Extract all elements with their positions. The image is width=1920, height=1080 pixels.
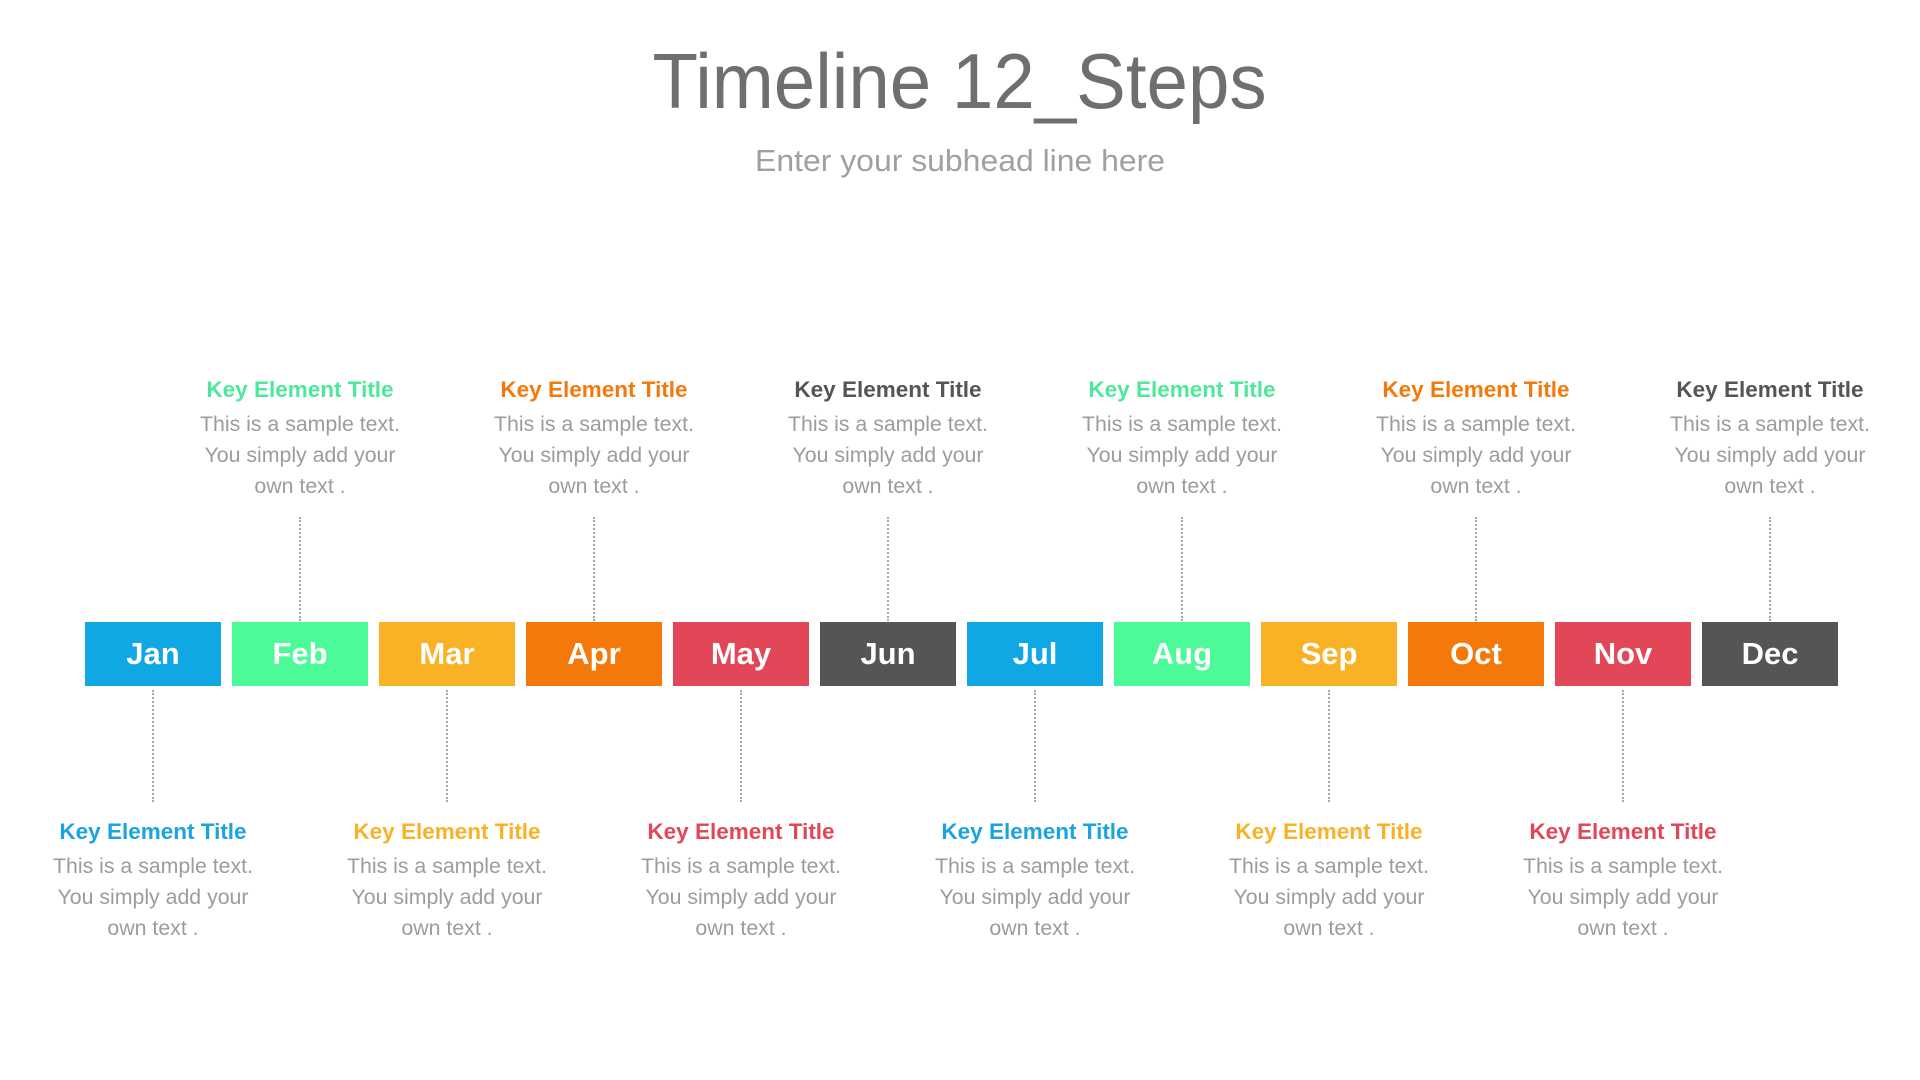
box: Nov: Nov — [1594, 636, 1652, 671]
box: Jul: Jul — [1013, 636, 1057, 671]
item: Aug top: own text . — [1136, 474, 1228, 498]
item: Aug top: You simply add your — [1086, 443, 1278, 467]
item: Apr top: Key Element Title — [500, 377, 688, 402]
item: May bottom: You simply add your — [646, 885, 836, 909]
item: Oct top: own text . — [1430, 474, 1522, 498]
item: Mar bottom: own text . — [401, 916, 493, 940]
item: Jan bottom: You simply add your — [58, 885, 248, 909]
item: Jul bottom: You simply add your — [940, 885, 1130, 909]
box: Jul — [967, 622, 1103, 686]
item: Nov bottom: You simply add your — [1528, 885, 1718, 909]
box: Mar — [379, 622, 515, 686]
item: Feb top: You simply add your — [204, 443, 396, 467]
item: Oct top: This is a sample text. — [1376, 412, 1576, 436]
box: Apr: Apr — [567, 636, 621, 671]
box: Dec — [1702, 622, 1838, 686]
item: Feb top: This is a sample text. — [200, 412, 400, 436]
item: May bottom: own text . — [695, 916, 787, 940]
box: May — [673, 622, 809, 686]
box: Oct: Oct — [1450, 636, 1502, 671]
item: Feb top: own text . — [254, 474, 346, 498]
item: Sep bottom: own text . — [1283, 916, 1375, 940]
item: Dec top: own text . — [1724, 474, 1816, 498]
item: Oct top: Key Element Title — [1382, 377, 1570, 402]
box: Feb — [232, 622, 368, 686]
item: Aug top — [1082, 377, 1282, 498]
item: May bottom: This is a sample text. — [641, 854, 841, 878]
item: Sep bottom — [1229, 819, 1429, 940]
item: Apr top: own text . — [548, 474, 640, 498]
item: Jan bottom: own text . — [107, 916, 199, 940]
item: Jul bottom: This is a sample text. — [935, 854, 1135, 878]
item: Oct top: You simply add your — [1380, 443, 1572, 467]
box: May: May — [711, 636, 771, 671]
item: May bottom — [641, 819, 841, 940]
box: Sep — [1261, 622, 1397, 686]
item: Oct top — [1376, 377, 1576, 498]
item: Jul bottom: Key Element Title — [941, 819, 1129, 844]
item: Feb top: Key Element Title — [206, 377, 394, 402]
box: Feb: Feb — [272, 636, 328, 671]
box: Jun: Jun — [860, 636, 916, 671]
item: Jun top: This is a sample text. — [788, 412, 988, 436]
item: Jan bottom: Key Element Title — [59, 819, 247, 844]
item: Jan bottom: This is a sample text. — [53, 854, 253, 878]
box: Jan: Jan — [126, 636, 180, 671]
item: Aug top: This is a sample text. — [1082, 412, 1282, 436]
item: Dec top — [1670, 377, 1870, 498]
item: Apr top: This is a sample text. — [494, 412, 694, 436]
box: Aug: Aug — [1152, 636, 1212, 671]
item: Nov bottom: This is a sample text. — [1523, 854, 1723, 878]
box: Mar: Mar — [419, 636, 475, 671]
item: Sep bottom: Key Element Title — [1235, 819, 1423, 844]
subhead: Enter your subhead line here — [755, 143, 1165, 178]
box: Jun — [820, 622, 956, 686]
box: Nov — [1555, 622, 1691, 686]
item: Nov bottom: own text . — [1577, 916, 1669, 940]
item: Jul bottom: own text . — [989, 916, 1081, 940]
item: Feb top — [200, 377, 400, 498]
box: Aug — [1114, 622, 1250, 686]
item: Dec top: You simply add your — [1674, 443, 1866, 467]
item: Apr top: You simply add your — [498, 443, 690, 467]
box: Dec: Dec — [1742, 636, 1798, 671]
box: Sep: Sep — [1301, 636, 1357, 671]
item: Apr top — [494, 377, 694, 498]
box: Apr — [526, 622, 662, 686]
title: Timeline 12_Steps — [653, 37, 1267, 125]
item: Aug top: Key Element Title — [1088, 377, 1276, 402]
item: Jun top: You simply add your — [792, 443, 984, 467]
item: Mar bottom — [347, 819, 547, 940]
item: Dec top: This is a sample text. — [1670, 412, 1870, 436]
item: Mar bottom: Key Element Title — [353, 819, 541, 844]
item: Nov bottom — [1523, 819, 1723, 940]
item: Mar bottom: You simply add your — [352, 885, 542, 909]
item: May bottom: Key Element Title — [647, 819, 835, 844]
item: Jul bottom — [935, 819, 1135, 940]
item: Jun top: own text . — [842, 474, 934, 498]
item: Nov bottom: Key Element Title — [1529, 819, 1717, 844]
item: Dec top: Key Element Title — [1676, 377, 1864, 402]
item: Sep bottom: This is a sample text. — [1229, 854, 1429, 878]
item: Sep bottom: You simply add your — [1234, 885, 1424, 909]
box: Oct — [1408, 622, 1544, 686]
item: Jun top — [788, 377, 988, 498]
item: Jun top: Key Element Title — [794, 377, 982, 402]
box: Jan — [85, 622, 221, 686]
item: Mar bottom: This is a sample text. — [347, 854, 547, 878]
item: Jan bottom — [53, 819, 253, 940]
